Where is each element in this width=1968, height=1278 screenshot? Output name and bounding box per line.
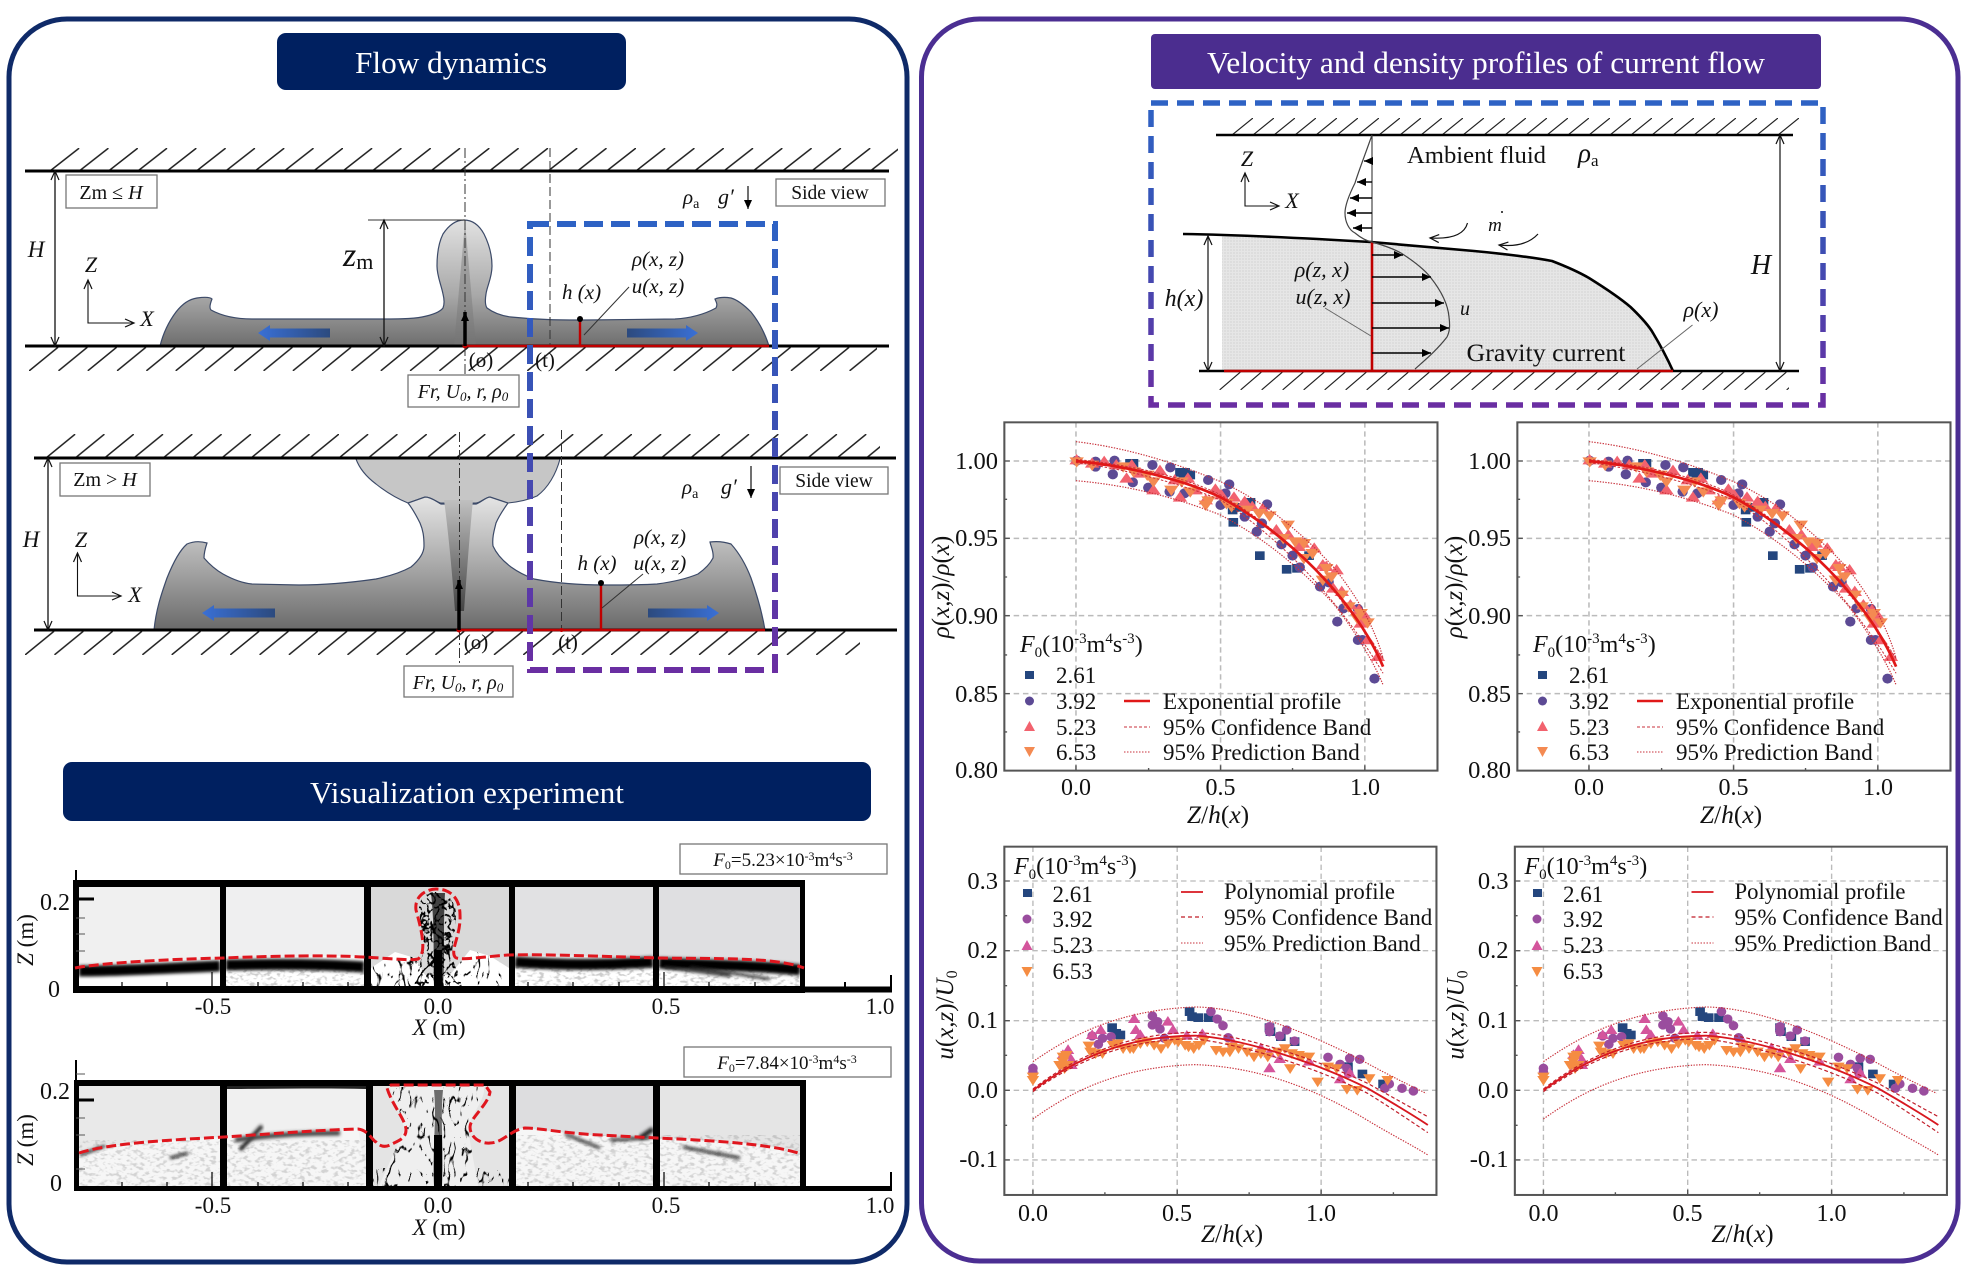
legend: 5.23: [1563, 933, 1603, 958]
walls: [34, 458, 897, 630]
legend: (10: [1036, 854, 1068, 880]
legend: 5.23: [1056, 715, 1096, 740]
axis titles: 0: [1454, 970, 1472, 978]
legend: 3.92: [1056, 689, 1096, 714]
y tick labels: 0.3: [967, 868, 998, 895]
F0 label: [684, 1047, 891, 1077]
coordinate axes: Z: [75, 527, 88, 552]
red measurement line: [459, 583, 765, 630]
legend: s: [1113, 632, 1122, 658]
ambient density and gravity: [682, 184, 748, 212]
legend: ): [1129, 854, 1137, 880]
axis titles: Z/h(x): [1187, 800, 1249, 829]
legend: -3: [1579, 853, 1591, 869]
F0 label: 4: [829, 849, 835, 863]
F0 label: =5.23×10: [731, 850, 805, 871]
y tick labels: 0.0: [1478, 1077, 1508, 1104]
x tick labels: 0.0: [1061, 775, 1091, 801]
y axis labels: 0.2: [40, 1079, 70, 1105]
heading: visualization experiment: Visualization experiment: [310, 775, 624, 810]
x axis labels: 0.0: [424, 1193, 452, 1218]
x tick labels: 0.5: [1206, 775, 1236, 801]
label: side view: [780, 467, 888, 494]
legend: 6.53: [1052, 959, 1093, 984]
x axis labels: X (m): [411, 1015, 466, 1040]
H dimension: H: [22, 527, 41, 552]
source parameter box: [404, 666, 513, 697]
schlieren panels: [75, 887, 804, 986]
label: Zm>H: [60, 463, 150, 496]
schlieren panels: [79, 1086, 801, 1186]
current surface: [1183, 234, 1673, 371]
heading: velocity and density profiles: Velocity and density profiles of current flow: [1207, 45, 1766, 80]
x tick labels: 1.0: [1816, 1201, 1846, 1227]
axis titles: [928, 536, 1249, 829]
left flow arrow: [258, 325, 330, 341]
legend: s: [1107, 854, 1116, 880]
legend: 3.92: [1569, 689, 1609, 714]
free surface, dashed red: [79, 1085, 801, 1154]
legend: ): [1648, 632, 1656, 658]
x axis labels: -0.5: [195, 1193, 231, 1218]
variable labels: [469, 247, 684, 372]
heading: flow dynamics: [277, 33, 626, 90]
y tick labels: 0.85: [1468, 681, 1511, 708]
variable labels: h (x): [562, 280, 601, 304]
x axis labels: 0.0: [424, 994, 452, 1019]
F0 label: 4: [833, 1052, 839, 1066]
coordinate axes: Z: [85, 252, 98, 277]
x tick labels: 0.0: [1574, 775, 1604, 801]
axis titles: Z/h(x): [1700, 800, 1762, 829]
legend: 0: [1029, 867, 1036, 883]
legend: 3.92: [1563, 907, 1603, 932]
ambient density and gravity: g′: [718, 184, 735, 209]
label: Zm>H: Zm > H: [73, 469, 138, 491]
F0 label: 0: [725, 858, 731, 872]
F0 label: F: [712, 850, 725, 871]
experiment image 2: [13, 1047, 894, 1240]
h(x) dimension: h(x): [1165, 286, 1203, 312]
x tick labels: 0.5: [1162, 1201, 1192, 1227]
legend: m: [1591, 854, 1610, 880]
legend: 2.61: [1569, 663, 1609, 688]
legend: F: [1013, 854, 1029, 880]
coordinate axes: X: [127, 582, 143, 607]
legend: m: [1087, 632, 1106, 658]
diagram: gravity current detail: [1151, 103, 1823, 405]
legend: 2.61: [1563, 882, 1603, 907]
axis titles: [1442, 970, 1774, 1248]
F0 label: s: [835, 850, 843, 871]
coordinate axes: [1241, 146, 1300, 213]
axis titles: [1441, 536, 1762, 829]
legend: F: [1532, 632, 1548, 658]
variable labels: (o): [464, 630, 488, 654]
red measurement line: [465, 319, 769, 346]
diagram: side view, Zm greater than H: [22, 430, 897, 697]
axis titles: ρ(x,z)/ρ(x): [928, 536, 955, 639]
zm dimension: z: [343, 237, 356, 274]
F0 label: -3: [809, 1052, 819, 1066]
legend: 3.92: [1052, 907, 1093, 932]
variable labels: ρ(x, z): [633, 525, 686, 549]
chart: density profile, left: [928, 422, 1437, 829]
x axis labels: X (m): [411, 1215, 466, 1240]
legend: -3: [1074, 631, 1087, 647]
left flow arrow: [202, 605, 275, 621]
y axis labels: 0: [48, 977, 60, 1003]
legend: [1524, 853, 1943, 984]
legend: (10: [1555, 632, 1587, 658]
F0 label: [680, 844, 887, 874]
legend: 4: [1105, 631, 1113, 647]
y tick labels: [959, 868, 998, 1173]
legend: -3: [1122, 631, 1135, 647]
source parameter box: 0: [497, 680, 504, 695]
zm dimension: m: [356, 249, 373, 274]
source parameter box: 0: [502, 389, 509, 404]
dashed frame: [1151, 103, 1823, 405]
legend: 4: [1610, 853, 1618, 869]
entrainment arrows: [1430, 211, 1538, 246]
legend: -3: [1627, 853, 1639, 869]
source parameter box: Fr, U: [413, 672, 455, 694]
F0 label: -3: [843, 849, 853, 863]
H dimension: H: [27, 237, 46, 262]
label: side view: Side view: [791, 183, 869, 204]
legend: 95% Prediction Band: [1163, 740, 1360, 765]
legend: 95% Confidence Band: [1163, 715, 1372, 740]
y tick labels: 0.90: [1468, 603, 1511, 630]
legend: 95% Prediction Band: [1676, 740, 1873, 765]
legend: 5.23: [1569, 715, 1609, 740]
legend: 6.53: [1056, 740, 1096, 765]
y tick labels: [955, 448, 998, 784]
y tick labels: [1468, 448, 1511, 784]
legend: ): [1135, 632, 1143, 658]
panel: flow dynamics and visualization: [9, 19, 907, 1262]
labels: [1294, 138, 1718, 369]
H dimension: H: [1750, 250, 1773, 281]
y tick labels: -0.1: [959, 1146, 998, 1173]
x axis labels: 1.0: [866, 994, 894, 1019]
legend: m: [1081, 854, 1100, 880]
legend: Exponential profile: [1163, 689, 1341, 714]
coordinate axes: [85, 252, 155, 331]
y tick labels: 0.80: [955, 757, 998, 784]
x tick labels: [1574, 775, 1893, 801]
F0 label: F: [716, 1053, 729, 1074]
axis titles: Z/h(x): [1201, 1219, 1263, 1248]
right flow arrow: [627, 325, 698, 341]
jet wedge: [444, 500, 473, 611]
ambient velocity profile: [1345, 135, 1372, 242]
variable labels: u(x, z): [632, 274, 684, 298]
legend: s: [1626, 632, 1635, 658]
x tick labels: 0.5: [1672, 1201, 1702, 1227]
legend: 6.53: [1563, 959, 1603, 984]
axis titles: ρ(x,z)/ρ(x): [1441, 536, 1468, 639]
legend: 5.23: [1052, 933, 1093, 958]
legend: 0: [1548, 645, 1555, 661]
label: Zm<=H: Zm ≤ H: [79, 182, 144, 204]
x axis labels: 1.0: [866, 1193, 894, 1218]
labels: u(z, x): [1296, 284, 1350, 309]
x axis labels: [195, 1193, 894, 1240]
legend: 95% Prediction Band: [1734, 931, 1932, 956]
legend: Polynomial profile: [1734, 879, 1906, 904]
chart: velocity profile, left: [932, 847, 1436, 1248]
legend: 6.53: [1569, 740, 1609, 765]
y axis labels: [13, 1074, 94, 1197]
h(x) dimension: [1165, 236, 1208, 371]
x axis labels: -0.5: [195, 994, 231, 1019]
y tick labels: 1.00: [1468, 448, 1511, 475]
source parameter box: , r, ρ: [467, 381, 502, 403]
legend: 4: [1099, 853, 1107, 869]
jet arrow: [463, 312, 467, 346]
legend: 0: [1035, 645, 1042, 661]
ambient density and gravity: ρ: [682, 475, 692, 499]
variable labels: (t): [558, 630, 578, 654]
labels: Gravity current: [1466, 340, 1626, 367]
axis titles: 0: [944, 970, 961, 978]
labels: u: [1460, 298, 1470, 320]
heading: flow dynamics: Flow dynamics: [355, 45, 547, 80]
jet arrow: [457, 580, 461, 630]
source parameter box: 0: [460, 389, 467, 404]
F0 label: -3: [805, 849, 815, 863]
red measurement lines: [1224, 242, 1673, 371]
F0 label: 0: [729, 1061, 735, 1075]
y tick labels: 0.80: [1468, 757, 1511, 784]
F0 label: m: [819, 1053, 834, 1074]
x tick labels: 1.0: [1350, 775, 1380, 801]
y tick labels: [1470, 868, 1508, 1173]
legend: [1013, 853, 1433, 984]
source centerline: [464, 148, 466, 374]
F0 label: s: [839, 1053, 847, 1074]
experiment image 1: [13, 844, 894, 1040]
legend: 95% Confidence Band: [1224, 905, 1433, 930]
x tick labels: [1528, 1201, 1846, 1227]
y tick labels: 0.2: [967, 937, 998, 964]
heading: visualization experiment: [63, 762, 871, 821]
label: side view: [776, 179, 885, 206]
variable labels: ρ(x, z): [631, 247, 684, 271]
y axis labels: Z (m): [13, 1114, 38, 1166]
x axis labels: 0.5: [652, 1193, 680, 1218]
y axis labels: 0.2: [40, 890, 70, 916]
lower current shape: [154, 497, 765, 630]
x tick labels: [1061, 775, 1380, 801]
ceiling spread: [356, 459, 560, 503]
legend: [1019, 631, 1372, 765]
x tick labels: 0.5: [1718, 775, 1748, 801]
F0 label: -3: [847, 1052, 857, 1066]
y axis labels: Z (m): [13, 914, 38, 966]
schlieren frame: [74, 1080, 806, 1191]
y tick labels: 0.3: [1478, 868, 1508, 895]
legend: -3: [1635, 631, 1648, 647]
label: side view: Side view: [795, 471, 873, 492]
schlieren frame: [73, 880, 805, 993]
legend: m: [1600, 632, 1619, 658]
x tick labels: 0.0: [1018, 1201, 1048, 1227]
source parameter box: , r, ρ: [462, 672, 497, 694]
legend: -3: [1068, 853, 1081, 869]
ambient density and gravity: [681, 466, 751, 502]
legend: F: [1019, 632, 1035, 658]
y tick labels: 0.95: [955, 525, 998, 552]
F0 label: =7.84×10: [735, 1053, 809, 1074]
y tick labels: 0.1: [1478, 1007, 1508, 1034]
legend: 0: [1539, 867, 1547, 883]
heading: velocity and density profiles: [1151, 34, 1821, 89]
current velocity profile: [1372, 242, 1450, 369]
legend: 95% Prediction Band: [1224, 931, 1421, 956]
x axis labels: 0.5: [652, 994, 680, 1019]
labels: ρ(z, x): [1294, 257, 1349, 282]
y tick labels: -0.1: [1470, 1146, 1508, 1173]
top and bottom walls: [25, 171, 889, 346]
gray gravity current: [1222, 236, 1673, 371]
coordinate axes: [75, 527, 143, 607]
y tick labels: 0.95: [1468, 525, 1511, 552]
y tick labels: 0.1: [967, 1007, 998, 1034]
coordinate axes: Z: [1241, 146, 1254, 171]
x tick labels: 1.0: [1306, 1201, 1336, 1227]
axis titles: u(x,z)/U: [932, 978, 959, 1060]
diagram: side view, Zm less than or equal to H: [25, 148, 898, 407]
legend: [1532, 631, 1885, 765]
ambient density and gravity: a: [693, 197, 700, 212]
ambient density and gravity: a: [692, 487, 699, 502]
ambient density and gravity: ρ: [683, 185, 693, 209]
coordinate axes: X: [1284, 188, 1300, 213]
ambient density and gravity: g′: [721, 474, 738, 499]
x tick labels: [1018, 1201, 1336, 1227]
y axis labels: [13, 890, 94, 1003]
legend: (10: [1547, 854, 1579, 880]
source parameter box: [408, 375, 519, 407]
legend: 95% Confidence Band: [1734, 905, 1943, 930]
x axis labels: [195, 994, 894, 1040]
panel: velocity and density profiles: [922, 19, 1958, 1261]
x tick labels: 0.0: [1528, 1201, 1558, 1227]
legend: s: [1617, 854, 1627, 880]
entrainment arrows: m: [1488, 215, 1502, 236]
axis titles: Z/h(x): [1711, 1219, 1774, 1248]
zm dimension: [342, 220, 465, 346]
legend: (10: [1042, 632, 1074, 658]
x tick labels: 1.0: [1863, 775, 1893, 801]
legend: Polynomial profile: [1224, 879, 1395, 904]
variable labels: (t): [535, 348, 555, 372]
chart: velocity profile, right: [1442, 847, 1947, 1248]
label: Zm<=H: [66, 175, 157, 208]
coordinate axes: X: [139, 306, 155, 331]
legend: 95% Confidence Band: [1676, 715, 1885, 740]
legend: Exponential profile: [1676, 689, 1854, 714]
F0 label: m: [815, 850, 830, 871]
y tick labels: 0.0: [967, 1077, 998, 1104]
axis titles: [932, 970, 1263, 1248]
plume and current shape: [160, 220, 769, 346]
variable labels: u(x, z): [634, 551, 686, 575]
legend: F: [1524, 854, 1540, 880]
variable labels: h (x): [577, 551, 617, 575]
free surface, dashed red: [75, 889, 804, 968]
y tick labels: 1.00: [955, 448, 998, 475]
labels: a: [1591, 151, 1599, 170]
labels: ρ: [1578, 138, 1591, 168]
y tick labels: 0.2: [1478, 937, 1508, 964]
chart: density profile, right: [1441, 422, 1950, 829]
right flow arrow: [648, 605, 719, 621]
legend: -3: [1587, 631, 1600, 647]
variable labels: (o): [469, 348, 493, 372]
labels: Ambient fluid: [1407, 143, 1546, 169]
legend: 2.61: [1056, 663, 1096, 688]
y tick labels: 0.85: [955, 681, 998, 708]
source parameter box: 0: [455, 680, 462, 695]
source parameter box: Fr, U: [418, 381, 460, 403]
variable labels: [464, 525, 686, 654]
dashed region box linking to profile detail: [530, 224, 775, 670]
y axis labels: 0: [50, 1171, 62, 1197]
legend: 4: [1618, 631, 1626, 647]
labels: ρ(x): [1683, 297, 1718, 322]
legend: -3: [1116, 853, 1129, 869]
legend: ): [1639, 854, 1647, 880]
legend: 2.61: [1052, 882, 1093, 907]
y tick labels: 0.90: [955, 603, 998, 630]
axis titles: u(x,z)/U: [1442, 978, 1470, 1060]
